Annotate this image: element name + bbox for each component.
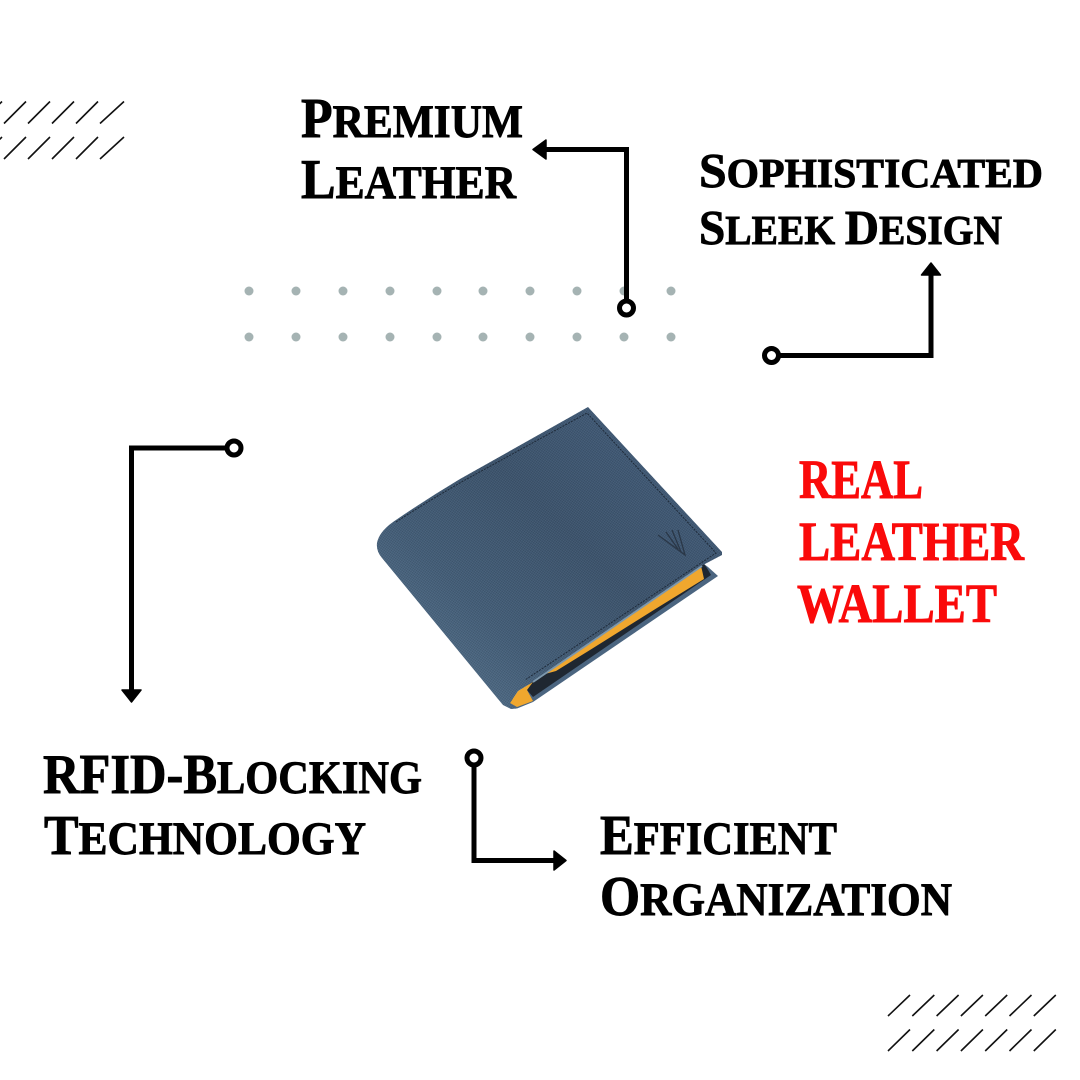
arrow: to RFID-Blocking Technology	[122, 441, 241, 702]
wallet dark inner lining	[527, 564, 711, 697]
hatch pattern: top left	[0, 102, 124, 159]
hatch pattern: bottom right	[888, 995, 1056, 1051]
heading: RFID-Blocking Technology	[43, 744, 422, 867]
heading: Premium Leather	[301, 88, 523, 211]
wallet illustration	[377, 407, 722, 709]
heading: Premium Leather: PREMIUM	[301, 88, 523, 150]
wallet yellow corner	[510, 682, 533, 707]
heading: Sophisticated Sleek Design: SOPHISTICATED	[699, 143, 1043, 198]
arrow: to Premium Leather	[533, 140, 634, 315]
wallet front cover	[377, 407, 722, 709]
wallet cover light edge	[533, 566, 702, 682]
wallet leather grain	[377, 407, 722, 709]
heading: RFID-Blocking Technology: RFID-BLOCKING	[43, 744, 422, 806]
heading: Efficient Organization	[600, 805, 952, 928]
heading: Sophisticated Sleek Design: SLEEK DESIGN	[699, 200, 1002, 255]
arrow: to Efficient Organization	[467, 751, 566, 870]
heading: Premium Leather: LEATHER	[301, 149, 517, 211]
dot grid	[244, 286, 676, 342]
arrow: to Sophisticated Sleek Design	[764, 263, 940, 362]
heading: Efficient Organization: ORGANIZATION	[600, 866, 952, 928]
heading: RFID-Blocking Technology: TECHNOLOGY	[44, 805, 366, 867]
wallet yellow interior strip	[545, 562, 704, 674]
heading: Real Leather Wallet: WALLET	[797, 573, 997, 634]
heading: Real Leather Wallet: REAL	[799, 449, 923, 510]
heading: Real Leather Wallet: LEATHER	[799, 511, 1025, 572]
heading: Real Leather Wallet	[797, 449, 1025, 634]
wallet logo	[658, 530, 685, 555]
wallet back layer	[507, 564, 718, 708]
heading: Sophisticated Sleek Design	[699, 143, 1043, 255]
heading: Efficient Organization: EFFICIENT	[600, 805, 837, 867]
wallet stitching	[396, 413, 716, 680]
